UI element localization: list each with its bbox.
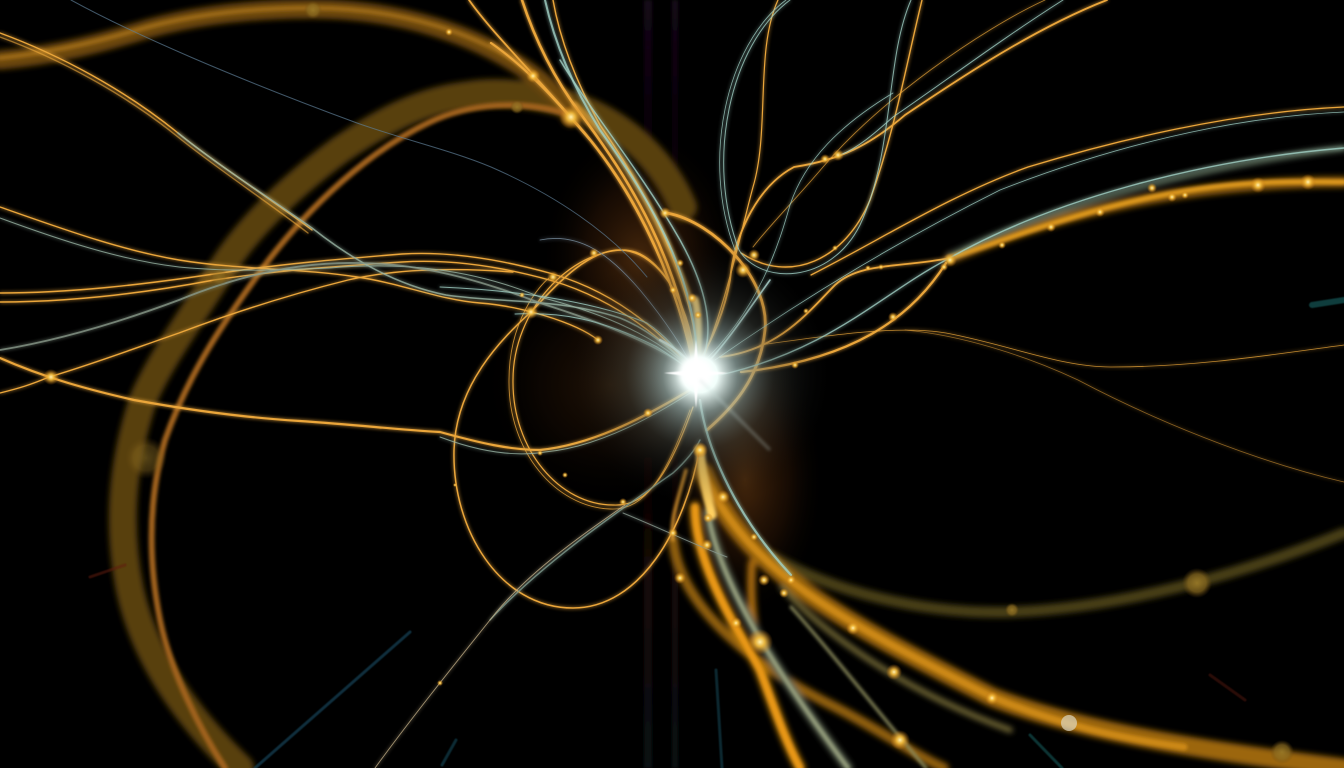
warm halos behind the core [480, 125, 825, 620]
faint vertical light streaks [644, 0, 678, 768]
thin blue streak in the top left [71, 0, 647, 277]
core glow [565, 240, 835, 510]
gold filaments [0, 0, 1344, 608]
faint coloured streaks [90, 300, 1344, 768]
